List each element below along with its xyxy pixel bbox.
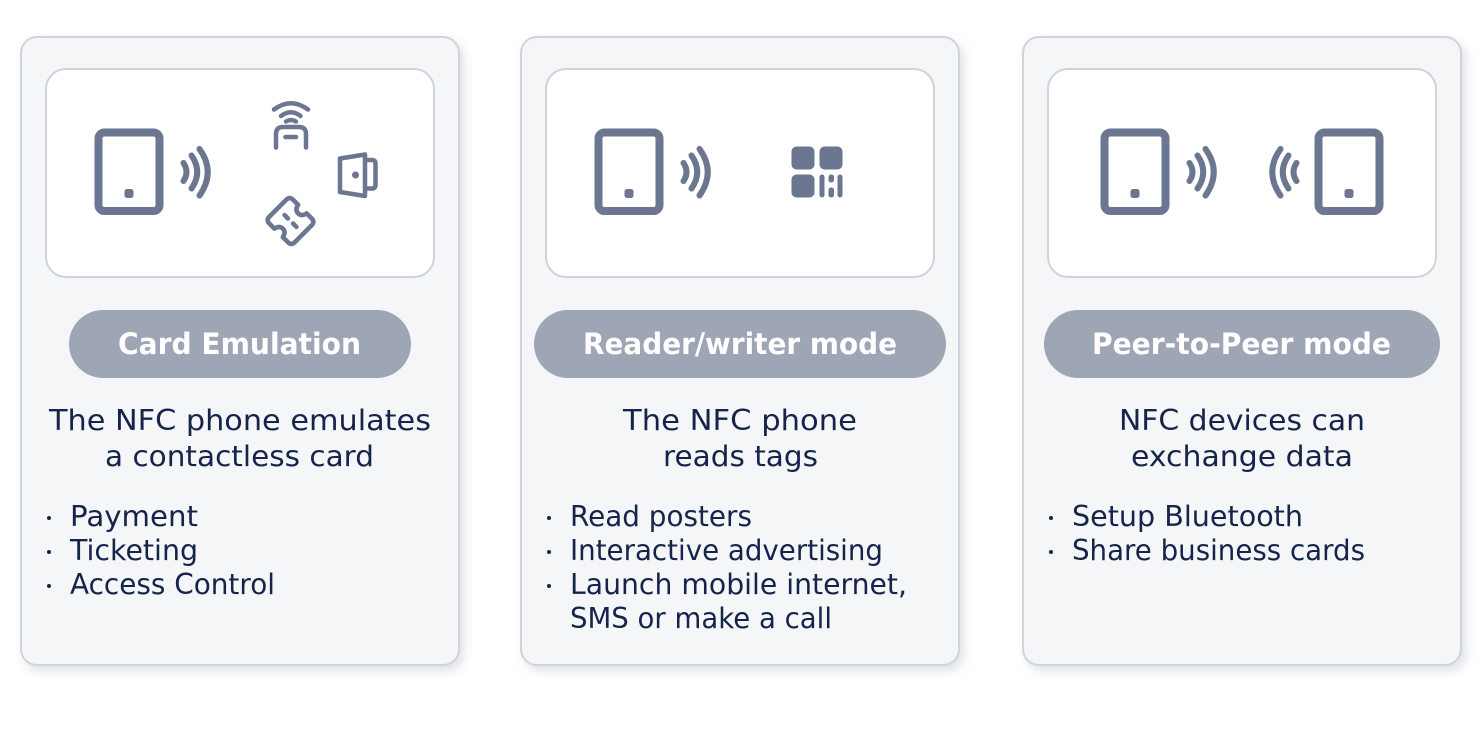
icon: ticket xyxy=(266,196,315,246)
icon: phone xyxy=(98,132,160,211)
icon: left nfc waves xyxy=(1190,149,1214,196)
bullet list: peer-to-peer: Setup Bluetooth xyxy=(1072,500,1303,533)
icon: qr code xyxy=(792,146,842,198)
icon box: card emulation xyxy=(46,69,434,277)
pill: reader/writer mode xyxy=(534,310,946,378)
panel: card emulation xyxy=(21,37,459,665)
icon: right nfc waves xyxy=(1272,149,1296,196)
description: reader/writer xyxy=(622,404,857,473)
description: peer-to-peer: NFC devices can xyxy=(1119,404,1365,437)
bullet list: card emulation: Ticketing xyxy=(69,534,198,567)
icon: right phone xyxy=(1318,132,1380,211)
description: card emulation: a contactless card xyxy=(105,440,374,473)
bullet list: peer-to-peer xyxy=(1049,500,1365,567)
bullet list: reader/writer: Interactive advertising xyxy=(570,534,883,567)
bullet list: peer-to-peer: Share business cards xyxy=(1072,534,1365,567)
icon: left phone xyxy=(1104,132,1166,211)
pill: card emulation xyxy=(69,310,411,378)
bullet list: reader/writer: Launch mobile internet, xyxy=(570,568,907,601)
icon: nfc waves xyxy=(684,149,708,196)
icon: access reader xyxy=(274,103,308,148)
icon: door xyxy=(340,154,376,196)
bullet list: reader/writer: SMS or make a call xyxy=(570,602,832,635)
bullet list: card emulation: Access Control xyxy=(70,568,275,601)
pill: peer-to-peer mode: Peer-to-Peer mode xyxy=(1092,327,1391,361)
pill: peer-to-peer mode xyxy=(1044,310,1440,378)
panel: peer-to-peer mode xyxy=(1023,37,1461,665)
description: reader/writer: reads tags xyxy=(663,440,818,473)
description: peer-to-peer: exchange data xyxy=(1131,440,1353,473)
description: card emulation xyxy=(48,404,431,473)
bullet list: card emulation xyxy=(47,500,275,601)
panel: reader/writer mode xyxy=(521,37,959,665)
icon box: peer-to-peer xyxy=(1048,69,1436,277)
bullet list: card emulation: Payment xyxy=(70,500,198,533)
bullet list: reader/writer: Read posters xyxy=(570,500,752,533)
icon: phone xyxy=(598,132,660,211)
icon box: reader/writer xyxy=(546,69,934,277)
description: card emulation: The NFC phone emulates xyxy=(48,404,431,437)
icon: nfc waves xyxy=(184,149,208,196)
description: peer-to-peer xyxy=(1119,404,1365,473)
description: reader/writer: The NFC phone xyxy=(622,404,857,437)
pill: card emulation: Card Emulation xyxy=(118,327,361,361)
bullet list: reader/writer xyxy=(547,500,907,635)
pill: reader/writer mode: Reader/writer mode xyxy=(583,327,897,361)
